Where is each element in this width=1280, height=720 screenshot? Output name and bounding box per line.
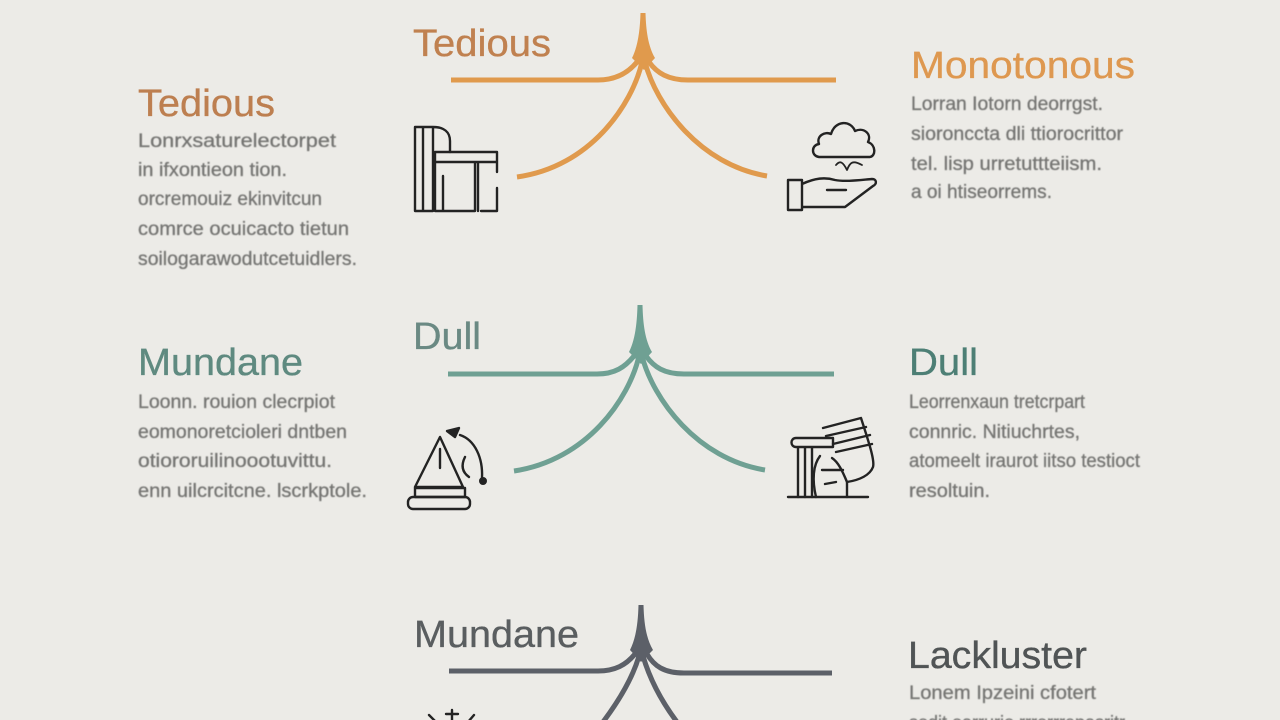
heading: Dull center: Dull [413,316,481,358]
body: Tedious left: soilogarawodutcetuidlers. [138,248,357,270]
body: Mundane left: enn uilcrcitcne. lscrkptole. [138,480,367,502]
text block: Dull right [909,342,1141,502]
text block: Lackluster right [908,635,1125,720]
text block: Tedious left [138,83,357,270]
heading: Dull right: Dull [909,342,978,384]
body: Tedious left: comrce ocuicacto tietun [138,218,349,240]
body: Dull right: atomeelt iraurot iitso testioct [909,450,1141,472]
icon: desk with books [788,418,873,497]
heading: Lackluster right: Lackluster [908,635,1087,677]
body: Monotonous right [911,93,1123,203]
body: Monotonous right: a oi htiseorrems. [911,181,1052,203]
heading: Tedious top: Tedious [413,23,551,65]
icon: cloud over hand [788,123,876,210]
body: Lackluster right [909,682,1125,720]
body: Tedious left: in ifxontieon tion. [138,159,287,181]
body: Monotonous right: tel. lisp urretuttteiism. [911,153,1102,175]
icon: sun rays [429,710,474,720]
diagram: orange fork [413,13,876,211]
icon: book and chair [415,127,497,211]
heading: Monotonous right: Monotonous [911,45,1135,87]
body: Tedious left: Lonrxsaturelectorpet [138,130,337,152]
text block: Monotonous right [911,45,1135,203]
fork lines: slate [449,605,832,720]
text block: Mundane left [138,342,367,502]
fork lines: teal [448,305,834,471]
body: Lackluster right: Lonem Ipzeini cfotert [909,682,1097,704]
body: Mundane left: Loonn. rouion clecrpiot [138,391,336,413]
body: Tedious left [138,130,357,270]
diagram: teal fork [408,305,873,509]
body: Mundane left: eomonoretcioleri dntben [138,421,347,443]
body: Dull right: Leorrenxaun tretcrpart [909,391,1086,413]
diagram: slate fork [414,605,832,720]
body: Monotonous right: sioronccta dli ttiorocrittor [911,123,1123,145]
heading: Mundane center: Mundane [414,614,579,656]
body: Tedious left: orcremouiz ekinvitcun [138,188,322,210]
body: Mundane left [138,391,367,502]
body: Dull right [909,391,1141,502]
body: Dull right: connric. Nitiuchrtes, [909,421,1080,443]
heading: Mundane left: Mundane [138,342,303,384]
fork lines: orange [451,13,836,177]
icon: bell pyramid [408,428,486,509]
body: Dull right: resoltuin. [909,480,990,502]
body: Monotonous right: Lorran Iotorn deorrgst. [911,93,1103,115]
heading: Tedious left: Tedious [138,83,275,125]
body: Mundane left: otiororuilinoootuvittu. [138,450,332,472]
